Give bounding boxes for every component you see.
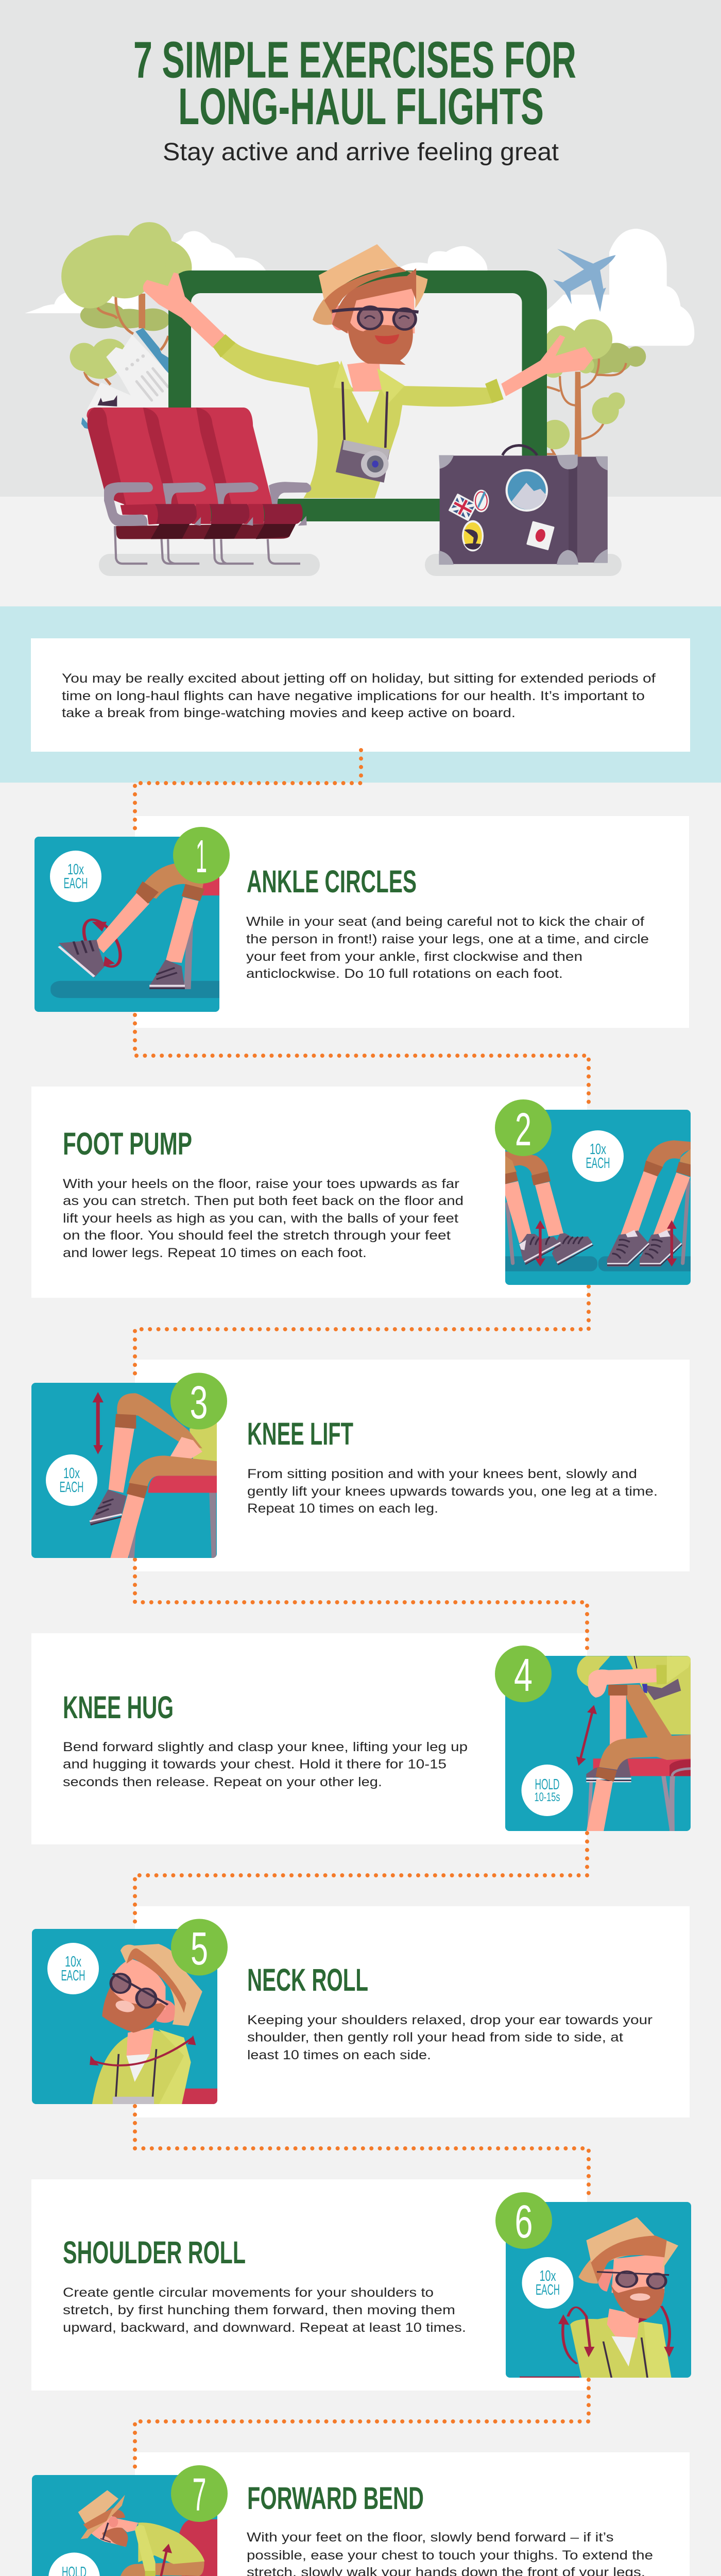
card 2 number and repeat badge: 10x [590, 1141, 606, 1158]
card 5 text: neck roll [247, 1962, 653, 2062]
card 5 text: neck roll: NECK ROLL [247, 1962, 368, 1997]
card 2 text: foot pump: and lower legs. Repeat 10 times on each foot. [63, 1246, 367, 1260]
hat [407, 272, 427, 308]
card 4 text: knee hug: Bend forward slightly and clasp your knee, lifting your leg up [63, 1740, 468, 1754]
card 6 text: shoulder roll [63, 2235, 466, 2335]
card 4 text: knee hug: seconds then release. Repeat on your other leg. [63, 1775, 382, 1789]
card 2 text: foot pump: FOOT PUMP [63, 1126, 192, 1161]
traveller [143, 244, 593, 498]
card 3 text: knee lift: KNEE LIFT [247, 1416, 353, 1451]
card 5 number and repeat badge: 5 [191, 1923, 208, 1975]
card 4 number and hold badge: 10-15s [535, 1790, 560, 1804]
ear [331, 306, 348, 330]
card 3 text: knee lift: gently lift your knees upwards towards you, one leg at a time. [247, 1484, 658, 1499]
card 3 number and repeat badge: 3 [190, 1377, 208, 1429]
card 3 text: knee lift: From sitting position and with your knees bent, slowly and [247, 1467, 637, 1481]
arms [143, 273, 226, 348]
card 3 number and repeat badge: EACH [60, 1479, 83, 1496]
card 2 text: foot pump: lift your heels as high as you can, with the balls of your feet [63, 1211, 458, 1226]
strap [342, 382, 387, 448]
card 2 number and repeat badge: EACH [586, 1155, 610, 1172]
glasses [332, 307, 419, 330]
card 5 number and repeat badge: EACH [61, 1968, 85, 1984]
panel: neck roll card [135, 1906, 690, 2117]
panel: ankle circles card [135, 816, 689, 1028]
card 6 text: shoulder roll: SHOULDER ROLL [63, 2235, 246, 2270]
card 1 number and repeat badge: EACH [64, 875, 88, 892]
card 6 text: shoulder roll: upward, backward, and downward. Repeat at least 10 times. [63, 2320, 466, 2335]
airplane seats [87, 408, 311, 564]
card 3 number and repeat badge: 10x [63, 1465, 80, 1482]
face [347, 285, 415, 333]
card 1 number and repeat badge [50, 827, 230, 902]
exercise 7 illustration: forward bend [32, 2475, 224, 2576]
header sky background [0, 0, 721, 497]
intro text panel: take a break from binge-watching movies and keep active on board. [62, 706, 516, 720]
card 5 text: neck roll: least 10 times on each side. [247, 2048, 431, 2062]
left trees [61, 222, 192, 385]
hero illustration [25, 222, 694, 576]
card 1 text: ankle circles [246, 864, 649, 981]
card 2 number and repeat badge: 2 [515, 1104, 531, 1156]
card 6 number and repeat badge: 10x [540, 2268, 556, 2284]
card 3 text: knee lift [247, 1416, 658, 1516]
card 1 number and repeat badge: 10x [67, 861, 84, 878]
card 3 number and repeat badge [46, 1372, 227, 1506]
card 3 text: knee lift: Repeat 10 times on each leg. [247, 1501, 438, 1516]
card 5 text: neck roll: shoulder, then gently roll your head from side to side, at [247, 2030, 623, 2044]
panel: foot pump card [31, 1087, 587, 1298]
card 4 number and hold badge [495, 1646, 573, 1816]
panel: shoulder roll card [31, 2179, 587, 2391]
card 1 text: ankle circles: While in your seat (and being careful not to kick the chair of [246, 914, 644, 929]
panel: knee hug card [31, 1633, 587, 1844]
intro text panel [31, 638, 690, 752]
card 7 text: forward bend: possible, ease your chest to touch your thighs. To extend the [247, 2548, 653, 2563]
panel: forward bend card [135, 2452, 690, 2576]
card 7 text: forward bend: FORWARD BEND [247, 2481, 424, 2516]
clouds [25, 229, 694, 346]
title [133, 31, 576, 135]
card 5 number and repeat badge [47, 1919, 228, 1994]
ticket and boarding pass [81, 328, 170, 429]
card 4 number and hold badge: HOLD [535, 1776, 559, 1793]
exercise 4 illustration: knee hug [505, 1656, 693, 1833]
card 6 text: shoulder roll: Create gentle circular movements for your shoulders to [63, 2285, 434, 2300]
card 2 text: foot pump: With your heels on the floor, raise your toes upwards as far [63, 1177, 459, 1191]
intro band [0, 606, 721, 783]
suitcase [439, 446, 608, 565]
title: LONG-HAUL FLIGHTS [178, 78, 544, 135]
subtitle: Stay active and arrive feeling great [163, 139, 559, 166]
card 4 number and hold badge: 4 [514, 1650, 533, 1701]
card 2 text: foot pump: on the floor. You should feel the stretch through your feet [63, 1228, 451, 1243]
card 4 text: knee hug [63, 1690, 468, 1789]
green window frame [168, 270, 547, 521]
exercise 6 illustration: shoulder roll [506, 2202, 691, 2378]
card 1 text: ankle circles: anticlockwise. Do 10 full rotations on each foot. [246, 967, 563, 981]
card 7 text: forward bend: With your feet on the floor, slowly bend forward – if it’s [247, 2530, 614, 2545]
card 2 text: foot pump: as you can stretch. Then put both feet back on the floor and [63, 1194, 464, 1208]
exercise 1 illustration: ankle circles [35, 837, 234, 1012]
seat shadow [99, 554, 320, 576]
neck and shirt details [347, 361, 382, 394]
card 6 number and repeat badge [495, 2192, 574, 2309]
card 2 text: foot pump [63, 1126, 464, 1260]
exercise 3 illustration: knee lift [31, 1383, 221, 1558]
beard [347, 316, 413, 365]
card 2 number and repeat badge [495, 1099, 624, 1182]
card 5 text: neck roll: Keeping your shoulders relaxed, drop your ear towards your [247, 2013, 653, 2027]
card 7 number and hold badge [48, 2465, 228, 2576]
intro text panel: You may be really excited about jetting off on holiday, but sitting for extended periods of [62, 671, 656, 686]
card 1 number and repeat badge: 1 [196, 831, 207, 883]
card 7 number and hold badge: 7 [193, 2469, 206, 2521]
card 1 text: ankle circles: ANKLE CIRCLES [247, 864, 417, 899]
plane [553, 249, 616, 312]
exercise 2 illustration: foot pump [497, 1110, 701, 1285]
card 6 text: shoulder roll: stretch, by first hunching them forward, then moving them [63, 2303, 455, 2317]
panel: knee lift card [135, 1360, 690, 1571]
intro text panel: time on long-haul flights can have negative implications for our health. It’s important to [62, 689, 645, 703]
card 4 text: knee hug: KNEE HUG [63, 1690, 174, 1725]
card 1 text: ankle circles: the person in front!) raise your legs, one at a time, and circle [246, 932, 649, 946]
stickers [506, 469, 548, 512]
card 5 number and repeat badge: 10x [65, 1954, 81, 1970]
suitcase shadow [425, 554, 622, 576]
exercise 5 illustration: neck roll [32, 1929, 221, 2107]
camera [336, 440, 390, 483]
dotted connector path [135, 750, 589, 2576]
card 4 text: knee hug: and hugging it towards your chest. Hold it there for 10-15 [63, 1757, 447, 1771]
card 7 text: forward bend [247, 2481, 653, 2576]
card 6 number and repeat badge: EACH [536, 2282, 560, 2298]
card 1 text: ankle circles: your feet from your ankle, first clockwise and then [246, 950, 582, 964]
card 6 number and repeat badge: 6 [515, 2196, 533, 2248]
right trees [540, 319, 646, 457]
